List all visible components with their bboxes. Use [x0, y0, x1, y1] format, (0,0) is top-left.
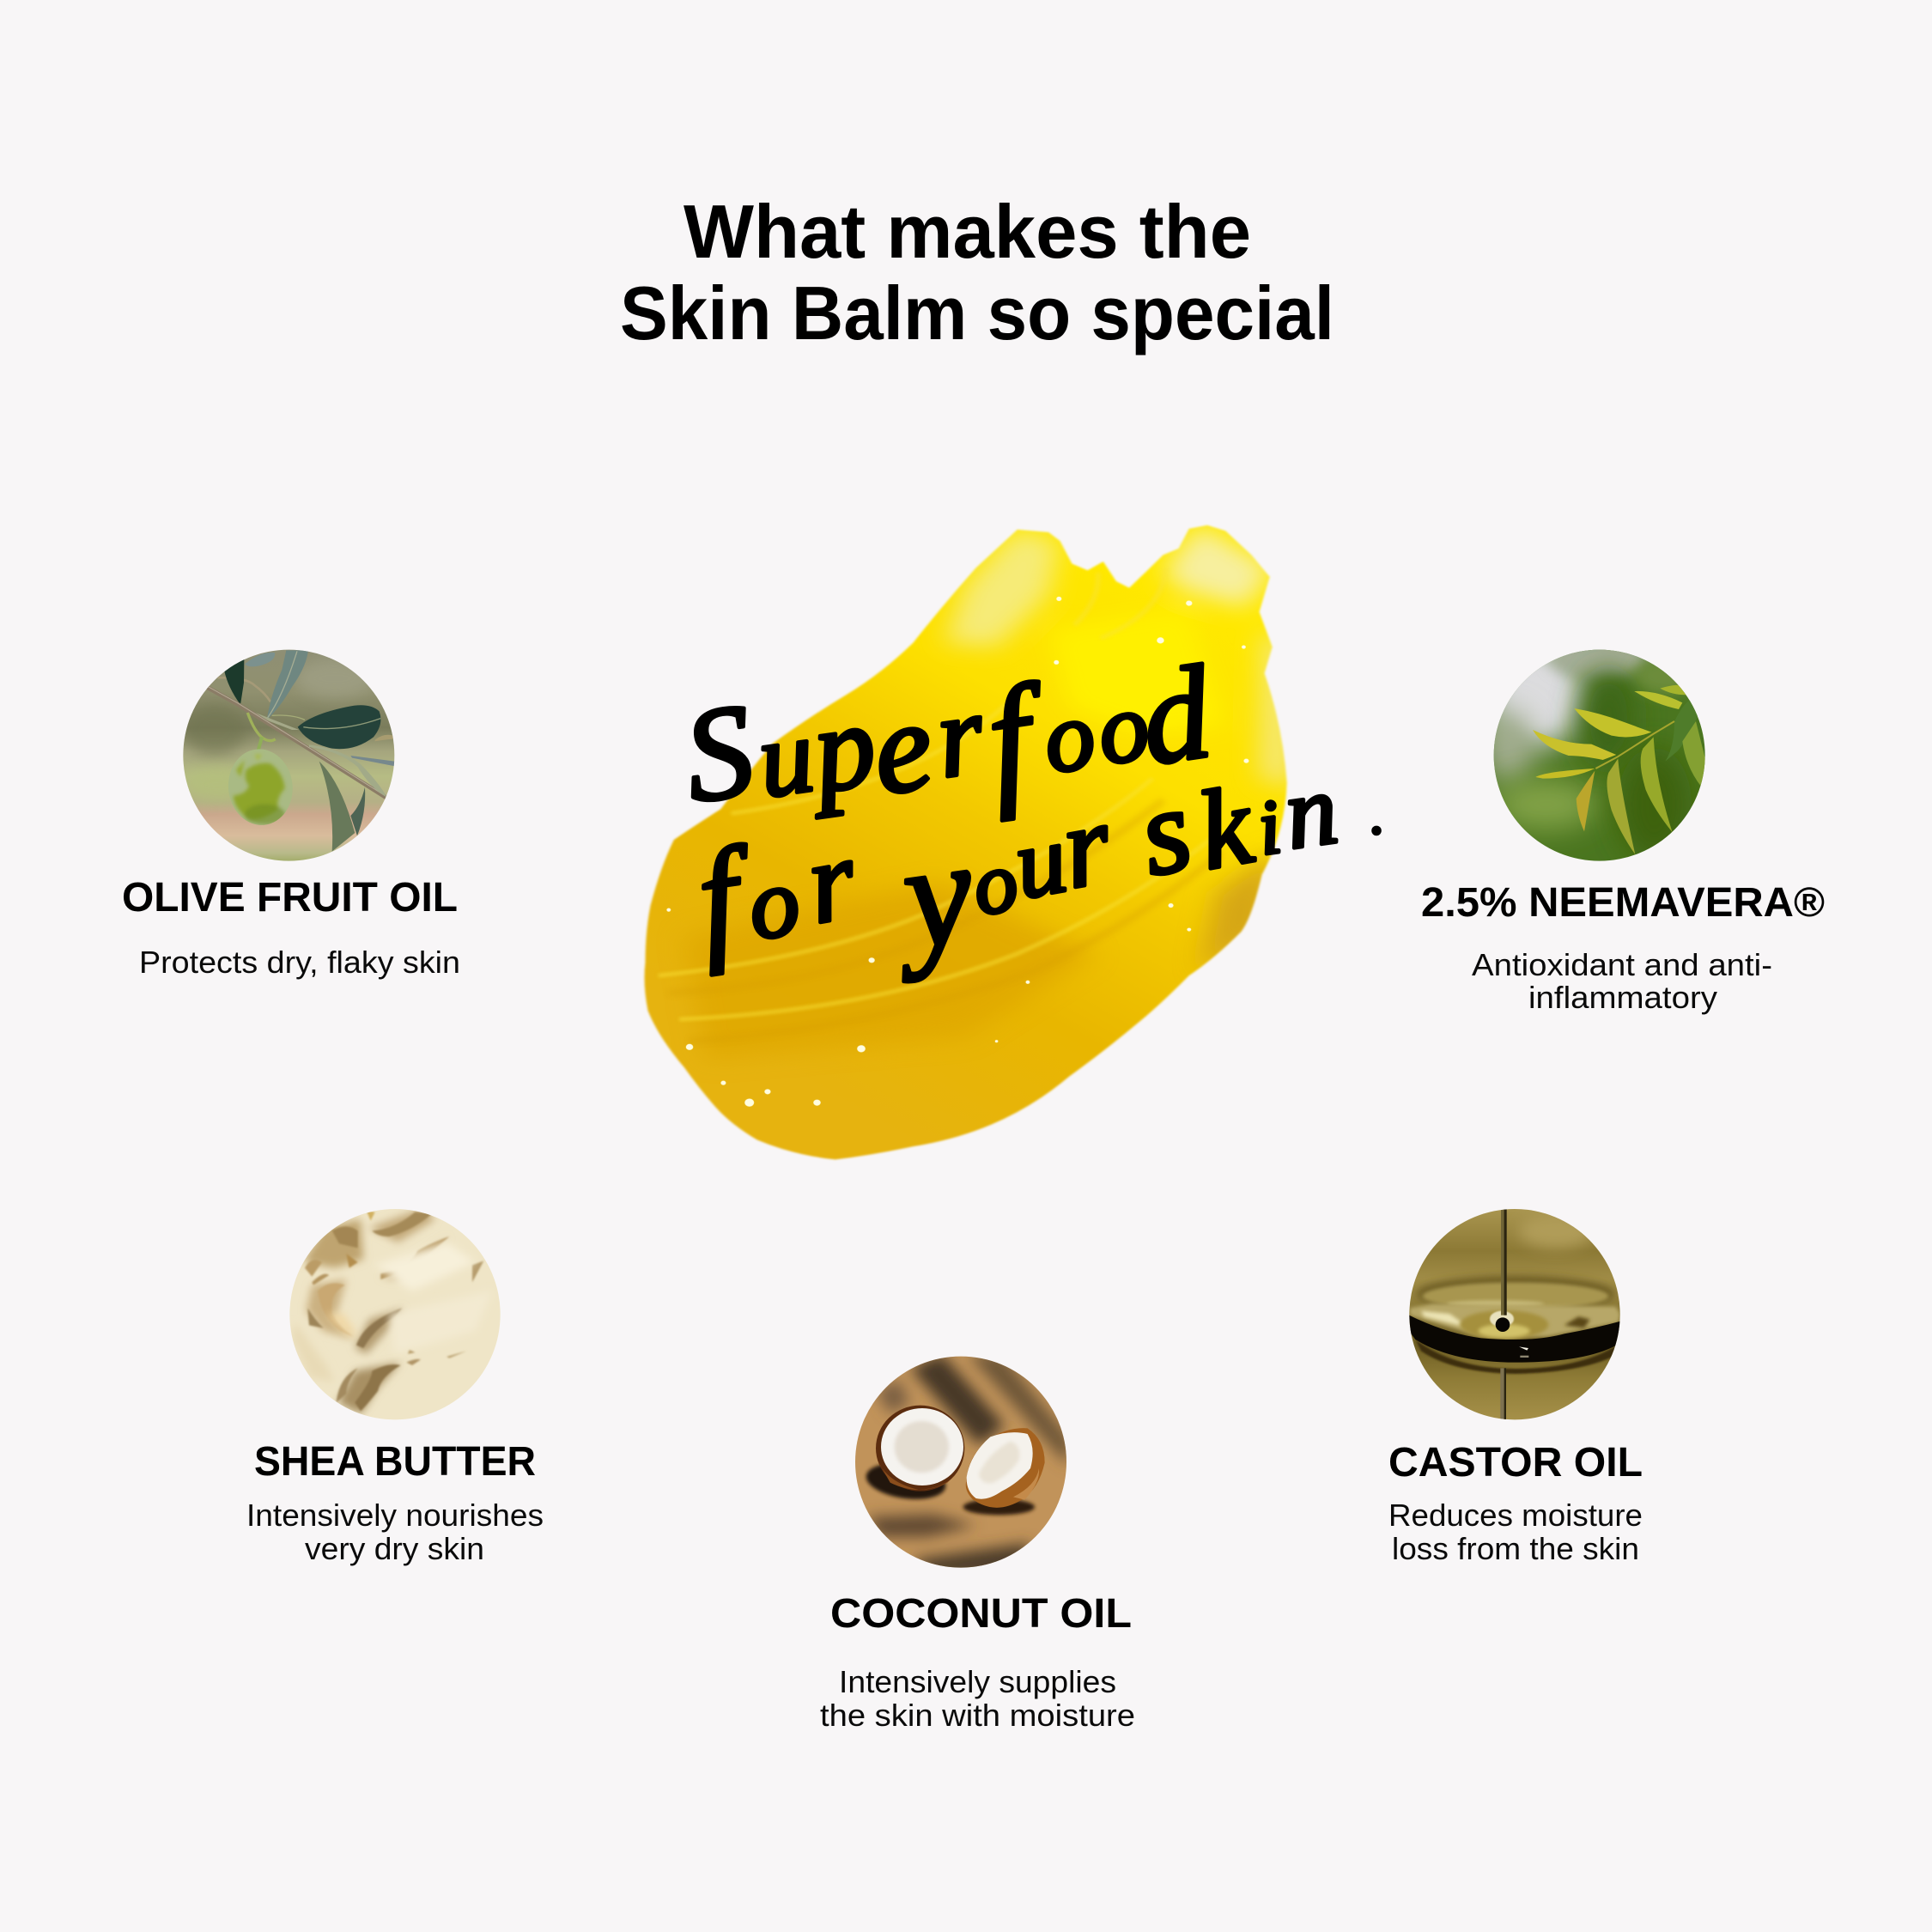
handwritten slogan: o — [1091, 671, 1155, 786]
central balm swatch with handwritten slogan: s — [1128, 762, 1202, 902]
handwritten slogan: S — [676, 676, 762, 831]
heading: CASTOR OIL — [1388, 1440, 1643, 1485]
heading: SHEA BUTTER — [254, 1439, 536, 1485]
central balm swatch with handwritten slogan: . — [1371, 787, 1384, 844]
description: very dry skin — [305, 1531, 484, 1566]
photo: olive branch — [180, 647, 398, 865]
central balm swatch with handwritten slogan: r — [798, 815, 865, 949]
heading: OLIVE FRUIT OIL — [122, 875, 458, 920]
description: Intensively supplies — [839, 1664, 1116, 1699]
balm smear — [642, 524, 1289, 1161]
heading: COCONUT OIL — [830, 1591, 1132, 1637]
olive fruit — [228, 749, 292, 825]
central balm swatch with handwritten slogan — [642, 524, 1382, 1161]
description: Protects dry, flaky skin — [139, 945, 460, 980]
ingredient: shea butter — [246, 1205, 544, 1566]
central balm swatch with handwritten slogan: f — [689, 817, 763, 976]
title: What makes the — [683, 189, 1251, 274]
handwritten slogan: e — [864, 673, 941, 823]
heading: 2.5% NEEMAVERA® — [1421, 880, 1825, 926]
description: Antioxidant and anti- — [1472, 947, 1772, 982]
description: the skin with moisture — [820, 1698, 1135, 1733]
handwritten slogan: f — [978, 653, 1057, 822]
central balm swatch with handwritten slogan: n — [1278, 752, 1344, 871]
photo: neem leaves — [1494, 649, 1705, 861]
description: Intensively nourishes — [246, 1498, 544, 1533]
ingredient: neemavera — [1421, 638, 1825, 1015]
handwritten slogan: o — [1037, 679, 1101, 794]
central balm swatch with handwritten slogan: y — [880, 807, 983, 983]
handwritten slogan: r — [928, 670, 992, 803]
central balm swatch with handwritten slogan: u — [1006, 804, 1074, 920]
description — [1388, 1498, 1643, 1566]
central balm swatch with handwritten slogan: k — [1190, 762, 1262, 894]
handwritten slogan: u — [751, 696, 821, 821]
central balm swatch with handwritten slogan: o — [742, 846, 805, 961]
description — [1472, 947, 1772, 1015]
title: Skin Balm so special — [620, 270, 1334, 355]
central balm swatch with handwritten slogan: r — [1053, 780, 1120, 914]
photo: oil drip — [1406, 1205, 1627, 1425]
central balm swatch with handwritten slogan: i — [1253, 784, 1286, 872]
photo: coconut halves on sand — [855, 1357, 1066, 1568]
ingredient: coconut oil — [820, 1351, 1135, 1733]
description: loss from the skin — [1392, 1531, 1639, 1566]
description — [820, 1664, 1135, 1733]
title — [620, 189, 1334, 355]
description: Reduces moisture — [1388, 1498, 1643, 1533]
ingredient: olive fruit oil — [122, 647, 460, 980]
description — [246, 1498, 544, 1566]
central balm swatch with handwritten slogan: o — [966, 833, 1024, 934]
handwritten slogan: p — [798, 677, 884, 819]
photo: shea butter — [286, 1205, 507, 1425]
ingredient: castor oil — [1388, 1205, 1643, 1566]
description: inflammatory — [1528, 980, 1717, 1015]
handwritten slogan: d — [1133, 637, 1219, 793]
